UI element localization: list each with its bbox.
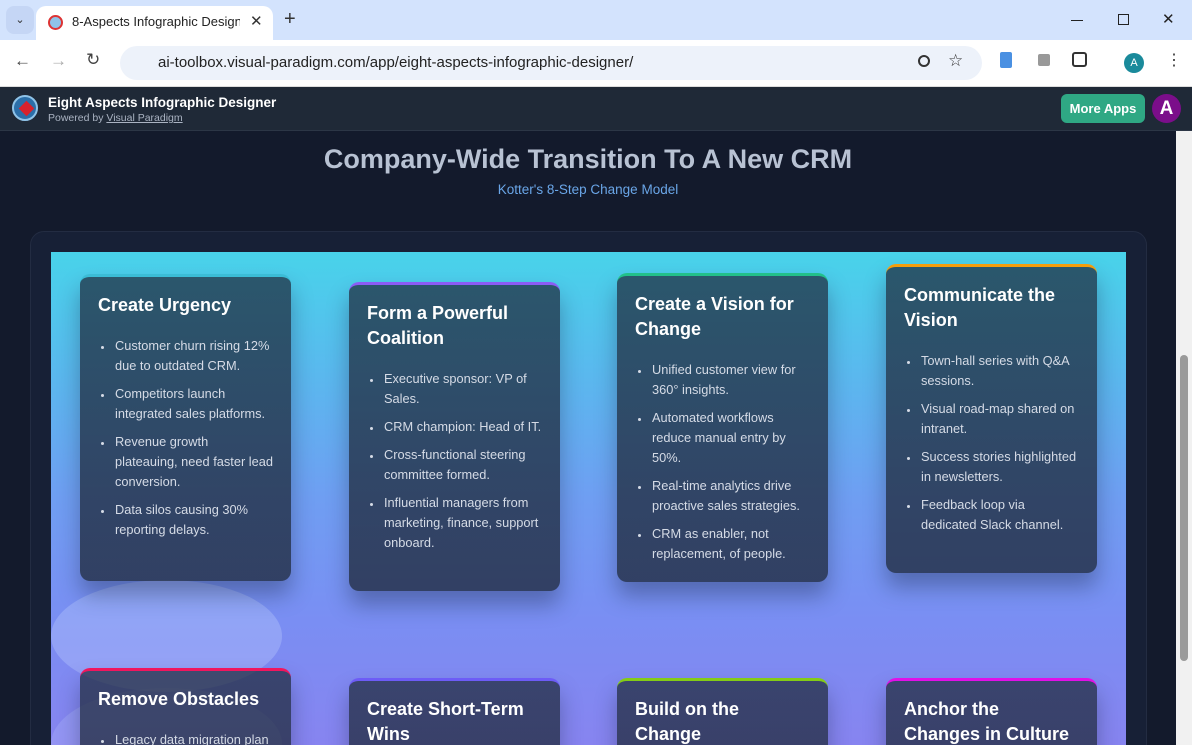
avatar — [1152, 94, 1181, 123]
card 7: Build on the Change: Build on the — [635, 699, 739, 719]
browser toolbar — [0, 40, 1192, 87]
tab dropdown — [6, 6, 34, 34]
browser tab bar: ✕ — [1162, 11, 1175, 28]
card 1: Create Urgency: Data silos causing 30% — [115, 502, 248, 517]
scrollbar — [1176, 131, 1192, 745]
infographic canvas — [51, 252, 1126, 745]
card 4: Communicate the Vision: Visual road-map shared on — [921, 401, 1074, 416]
card 7: Build on the Change — [617, 678, 828, 745]
address bar: ☆ — [948, 51, 963, 70]
app header: Powered by Visual Paradigm — [48, 112, 183, 124]
card 4: Communicate the Vision: Feedback loop via — [921, 497, 1025, 512]
card 3: Create a Vision for Change: reduce manual entry by — [652, 430, 786, 445]
outer panel — [30, 231, 1147, 745]
card 1: Create Urgency: plateauing, need faster lead — [115, 454, 273, 469]
active tab — [36, 6, 273, 40]
active tab: ✕ — [250, 13, 263, 30]
logo icon — [12, 95, 38, 121]
card 2: Form a Powerful Coalition: marketing, finance, support — [384, 515, 538, 530]
card 3: Create a Vision for Change: CRM as enabler, not — [652, 526, 769, 541]
card 1: Create Urgency: Create Urgency — [98, 295, 231, 315]
card 3: Create a Vision for Change: 50%. — [652, 450, 681, 465]
card 6: Create Short-Term Wins: Create Short-Term — [367, 699, 524, 719]
subtitle: Kotter's 8-Step Change Model — [498, 182, 678, 197]
new tab: + — [284, 8, 296, 30]
card 1: Create Urgency: Customer churn rising 12% — [115, 338, 269, 353]
card 1: Create Urgency: reporting delays. — [115, 522, 210, 537]
card 8: Anchor the Changes in Culture: Anchor the — [904, 699, 999, 719]
card 4: Communicate the Vision: dedicated Slack channel. — [921, 517, 1063, 532]
card 3: Create a Vision for Change: Automated workflows — [652, 410, 774, 425]
card 4: Communicate the Vision — [886, 264, 1097, 573]
browser toolbar: ← — [14, 51, 31, 70]
card 2: Form a Powerful Coalition: Cross-functional steering — [384, 447, 526, 462]
avatar: A — [1160, 98, 1173, 119]
card 3: Create a Vision for Change: Unified customer view for — [652, 362, 796, 377]
card 5: Remove Obstacles: Remove Obstacles — [98, 689, 259, 709]
browser toolbar: ⋮ — [1166, 52, 1182, 69]
app header — [0, 87, 1192, 131]
address bar — [120, 46, 982, 80]
card 3: Create a Vision for Change: Create a Vision for — [635, 294, 794, 314]
card 1: Create Urgency: Revenue growth — [115, 434, 208, 449]
card 4: Communicate the Vision: Success stories highlighted — [921, 449, 1076, 464]
card 4: Communicate the Vision: Town-hall series with Q&A — [921, 353, 1070, 368]
card 2: Form a Powerful Coalition: Executive sponsor: VP of — [384, 371, 527, 386]
card 2: Form a Powerful Coalition: Coalition — [367, 328, 444, 348]
card 2: Form a Powerful Coalition: CRM champion: Head of IT. — [384, 419, 541, 434]
card 2: Form a Powerful Coalition: onboard. — [384, 535, 435, 550]
card 3: Create a Vision for Change: proactive sales strategies. — [652, 498, 800, 513]
card 4: Communicate the Vision: in newsletters. — [921, 469, 1003, 484]
card 3: Create a Vision for Change — [617, 273, 828, 582]
address bar: ai-toolbox.visual-paradigm.com/app/eight-aspects-infographic-designer/ — [158, 54, 633, 71]
card 2: Form a Powerful Coalition: Influential managers from — [384, 495, 528, 510]
card 1: Create Urgency: integrated sales platforms. — [115, 406, 265, 421]
card 2: Form a Powerful Coalition: Form a Powerful — [367, 303, 508, 323]
card 3: Create a Vision for Change: 360° insights. — [652, 382, 729, 397]
card 6: Create Short-Term Wins — [349, 678, 560, 745]
card 8: Anchor the Changes in Culture: Changes in Culture — [904, 724, 1069, 744]
browser toolbar: → — [50, 51, 67, 70]
card 1: Create Urgency: conversion. — [115, 474, 180, 489]
card 2: Form a Powerful Coalition: Sales. — [384, 391, 420, 406]
card 7: Build on the Change: Change — [635, 724, 701, 744]
more apps button — [1061, 94, 1145, 123]
card 4: Communicate the Vision: Communicate the — [904, 285, 1055, 305]
card 3: Create a Vision for Change: Real-time analytics drive — [652, 478, 791, 493]
more apps button: More Apps — [1070, 101, 1136, 116]
card 3: Create a Vision for Change: replacement, of people. — [652, 546, 786, 561]
card 2: Form a Powerful Coalition: committee formed. — [384, 467, 490, 482]
browser toolbar: A — [1130, 57, 1138, 69]
card 1: Create Urgency — [80, 274, 291, 581]
card 6: Create Short-Term Wins: Wins — [367, 724, 410, 744]
card 1: Create Urgency: Competitors launch — [115, 386, 225, 401]
card 3: Create a Vision for Change: Change — [635, 319, 701, 339]
card 5: Remove Obstacles — [80, 668, 291, 745]
title: Company-Wide Transition To A New CRM — [324, 144, 852, 174]
card 2: Form a Powerful Coalition — [349, 282, 560, 591]
tab dropdown: ⌄ — [15, 14, 25, 26]
browser toolbar: ↻ — [86, 50, 100, 69]
browser tab bar — [0, 0, 1192, 40]
app title: Eight Aspects Infographic Designer — [48, 95, 276, 110]
card 1: Create Urgency: due to outdated CRM. — [115, 358, 240, 373]
card 4: Communicate the Vision: intranet. — [921, 421, 967, 436]
card 8: Anchor the Changes in Culture — [886, 678, 1097, 745]
card 4: Communicate the Vision: Vision — [904, 310, 958, 330]
window controls — [1071, 20, 1083, 21]
card 4: Communicate the Vision: sessions. — [921, 373, 974, 388]
